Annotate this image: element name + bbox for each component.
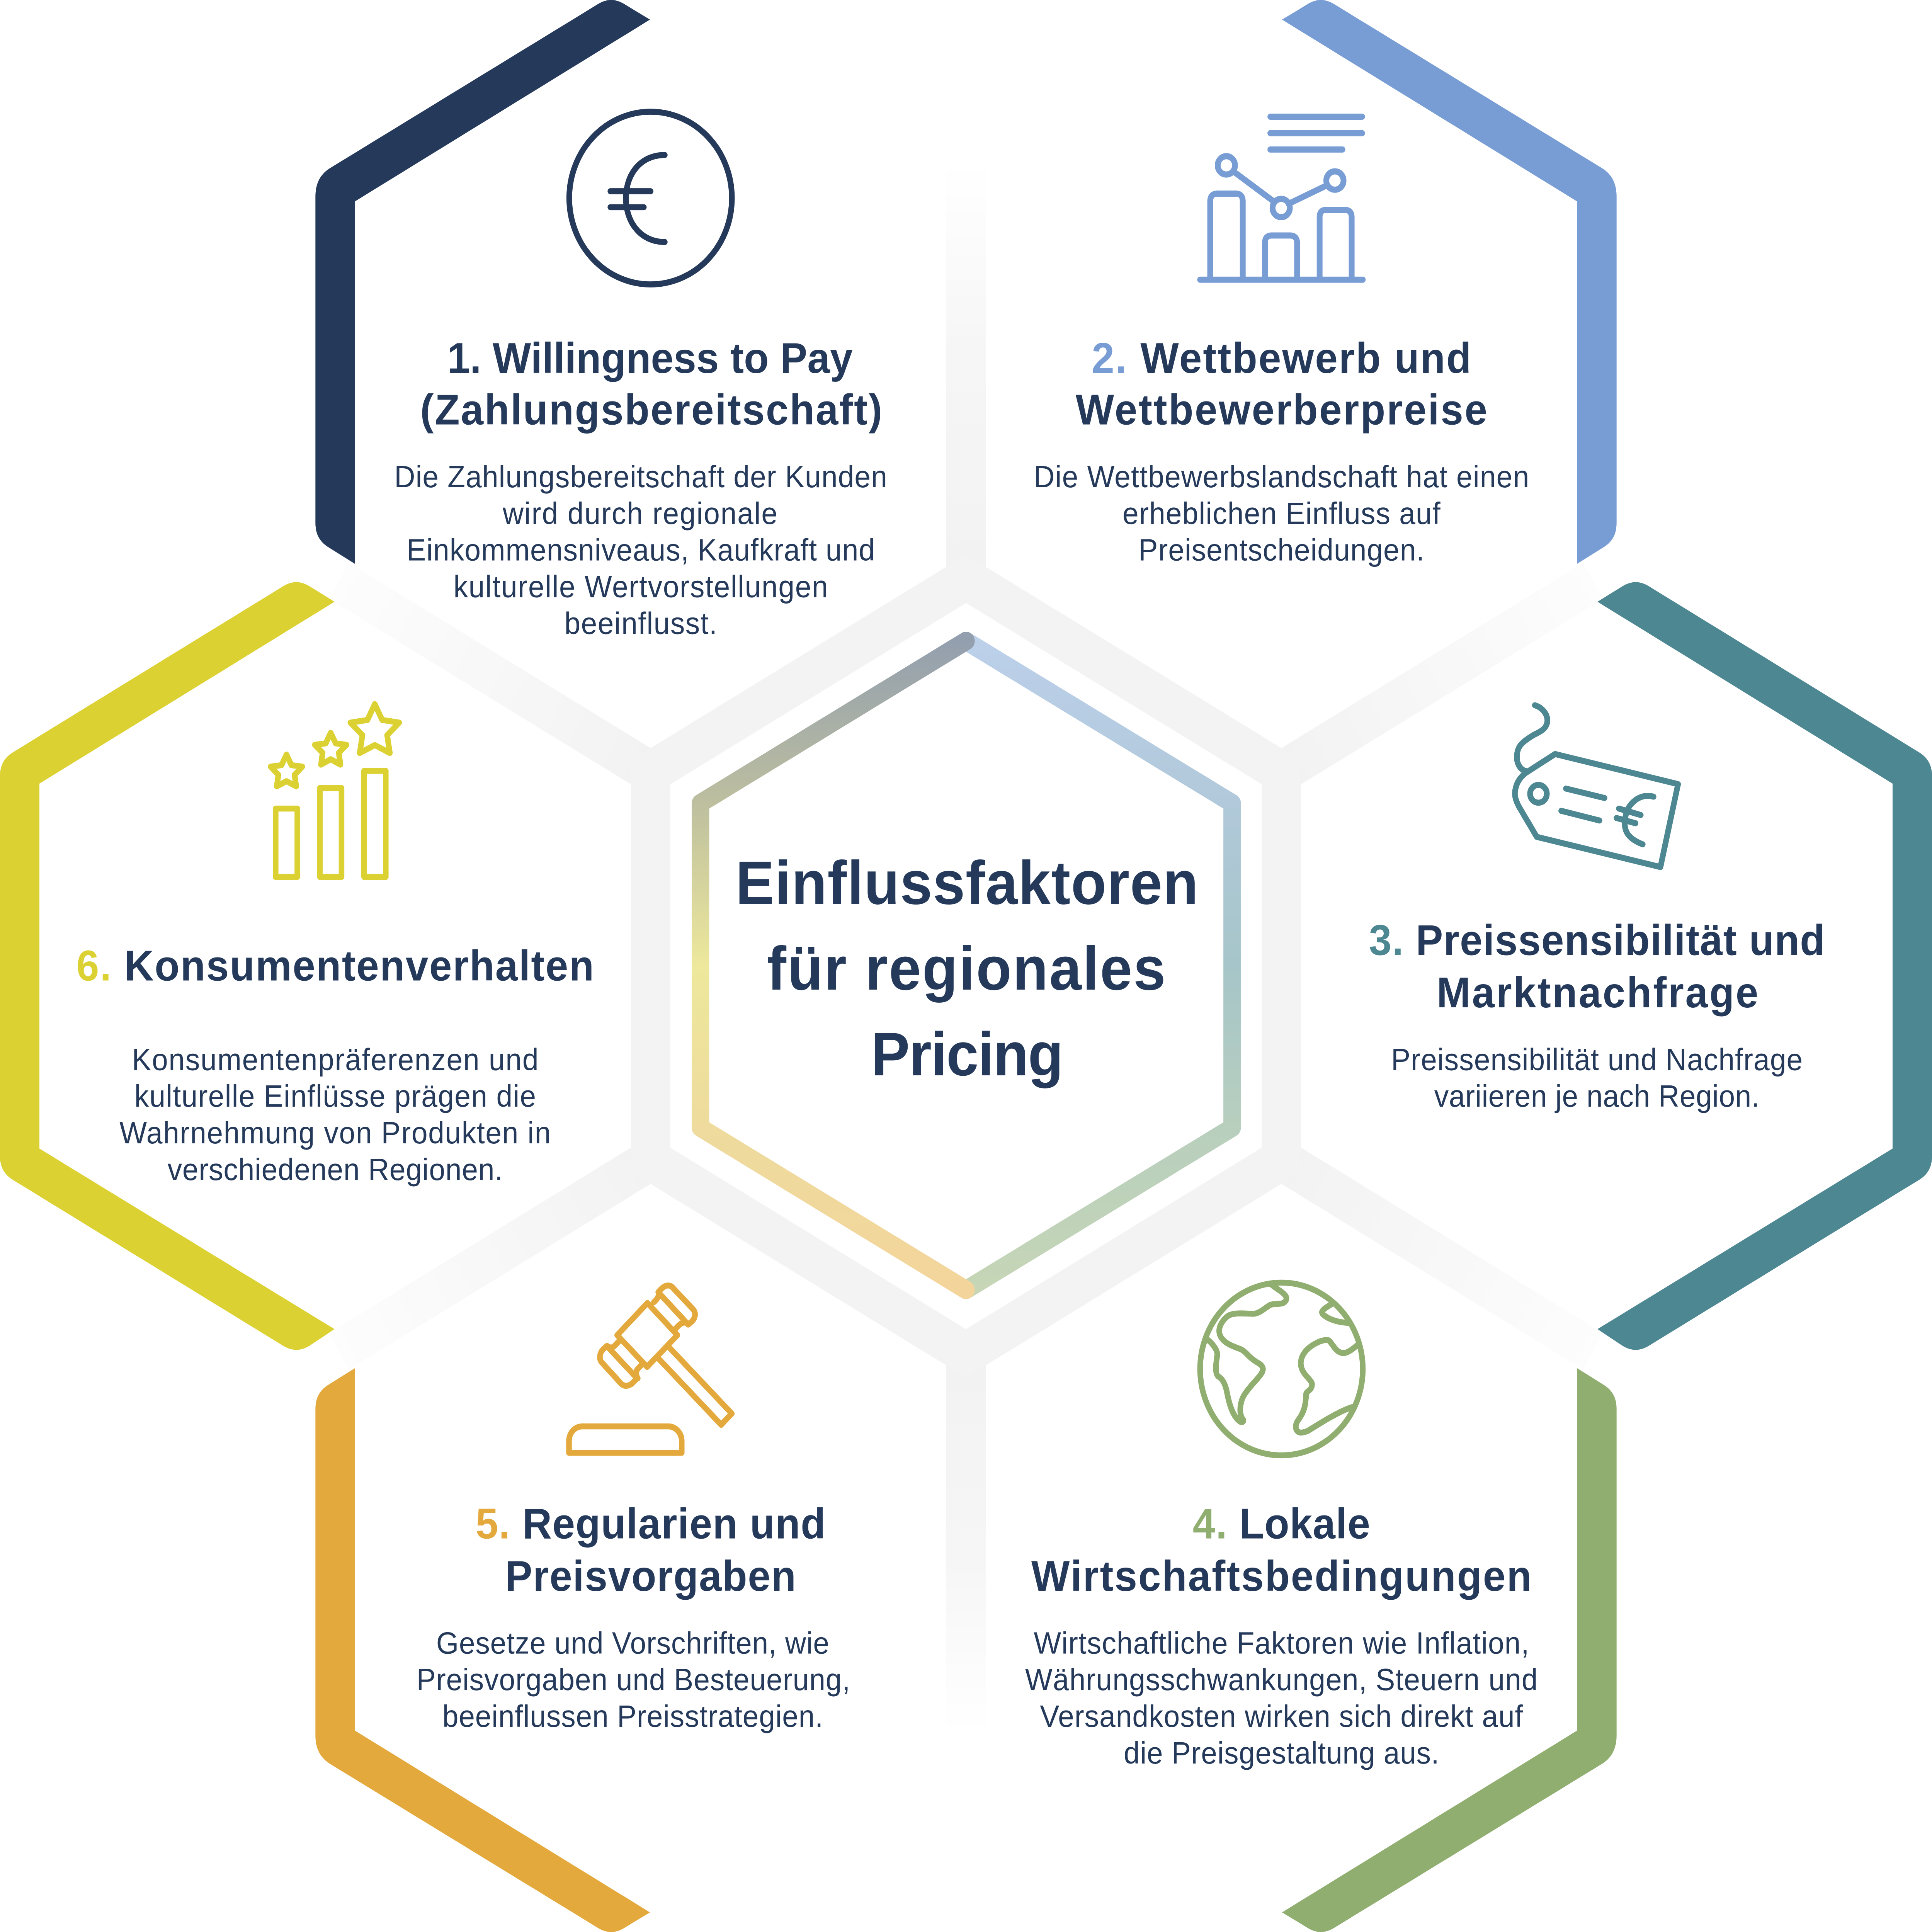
background honeycomb connector lines [339, 163, 1593, 1733]
icon: stars and bars [270, 704, 399, 877]
heading 4: Wirtschaftsbedingungen [1031, 1552, 1532, 1600]
heading 4: 4. Lokale [1193, 1500, 1370, 1548]
heading 1: 1. Willingness to Pay [447, 334, 853, 382]
text block 5 [417, 1626, 850, 1733]
heading 5: 5. Regularien und [476, 1500, 825, 1548]
hexagon frame 6 [0, 582, 335, 1350]
panel 3: Preissensibilität [1369, 582, 1932, 1350]
text block 5: Preisvorgaben und Besteuerung, [417, 1663, 850, 1697]
title: Pricing [871, 1020, 1063, 1088]
text block 4 [1025, 1626, 1538, 1770]
heading 1: (Zahlungsbereitschaft) [420, 386, 882, 434]
panel 2: Wettbewerb [1034, 0, 1617, 567]
text block 2: erheblichen Einfluss auf [1122, 497, 1440, 531]
central gradient outline [701, 641, 1232, 1290]
text block 4: Währungsschwankungen, Steuern und [1025, 1663, 1538, 1697]
heading 3: Marktnachfrage [1437, 968, 1758, 1017]
heading 3: 3. Preissensibilität und [1369, 916, 1825, 964]
hexagon frame 5 [315, 1368, 650, 1932]
panel 6: Konsumentenverhalten [0, 582, 594, 1350]
title: für regionales [767, 934, 1166, 1003]
text block 6 [119, 1043, 551, 1187]
heading 2: 2. Wettbewerb und [1092, 334, 1471, 382]
text block 1: wird durch regionale [502, 497, 777, 531]
hexagon frame 4 [1282, 1368, 1617, 1932]
text block 3: Preissensibilität und Nachfrage [1391, 1043, 1803, 1077]
text block 6: Wahrnehmung von Produkten in [119, 1116, 551, 1150]
text block 1: beeinflusst. [564, 606, 717, 641]
text block 4: Wirtschaftliche Faktoren wie Inflation, [1034, 1626, 1529, 1660]
panel 5: Regularien [315, 1286, 850, 1932]
hexagon frame 2 [1282, 0, 1617, 564]
icon: chart with line [1200, 117, 1363, 280]
heading 2 [1076, 334, 1487, 434]
heading 3 [1369, 916, 1825, 1017]
title: Einflussfaktoren [736, 848, 1198, 917]
heading 1 [420, 334, 882, 434]
icon: euro coin [569, 112, 732, 284]
icon: gavel [569, 1286, 732, 1453]
text block 5: Gesetze und Vorschriften, wie [436, 1626, 829, 1660]
text block 4: Versandkosten wirken sich direkt auf [1040, 1699, 1523, 1733]
title [736, 848, 1198, 1088]
heading 5 [476, 1500, 825, 1600]
panel 1: Willingness to Pay [315, 0, 887, 641]
text block 6: kulturelle Einflüsse prägen die [134, 1079, 536, 1114]
text block 1 [394, 460, 887, 641]
heading 2: Wettbewerberpreise [1076, 386, 1487, 434]
text block 3 [1391, 1043, 1803, 1114]
text block 2: Die Wettbewerbslandschaft hat einen [1034, 460, 1529, 494]
text block 2 [1034, 460, 1529, 567]
text block 6: verschiedenen Regionen. [168, 1153, 503, 1187]
heading 6: 6. Konsumentenverhalten [77, 942, 594, 990]
text block 6: Konsumentenpräferenzen und [132, 1043, 538, 1077]
text block 2: Preisentscheidungen. [1138, 533, 1424, 567]
panel 4: Lokale Wirtschaftsbedingungen [1025, 1282, 1617, 1932]
text block 5: beeinflussen Preisstrategien. [442, 1699, 823, 1733]
text block 4: die Preisgestaltung aus. [1124, 1736, 1439, 1770]
icon: globe [1200, 1282, 1363, 1455]
text block 3: variieren je nach Region. [1434, 1079, 1760, 1114]
text block 1: kulturelle Wertvorstellungen [453, 570, 828, 604]
text block 1: Einkommensniveaus, Kaufkraft und [406, 533, 875, 567]
hexagon frame 3 [1597, 582, 1932, 1350]
text block 1: Die Zahlungsbereitschaft der Kunden [394, 460, 887, 494]
panel: central hexagon [701, 641, 1232, 1290]
hexagon frame 1 [315, 0, 650, 564]
icon: price tag [1515, 705, 1678, 867]
heading 4 [1031, 1500, 1532, 1600]
heading 5: Preisvorgaben [505, 1552, 796, 1600]
